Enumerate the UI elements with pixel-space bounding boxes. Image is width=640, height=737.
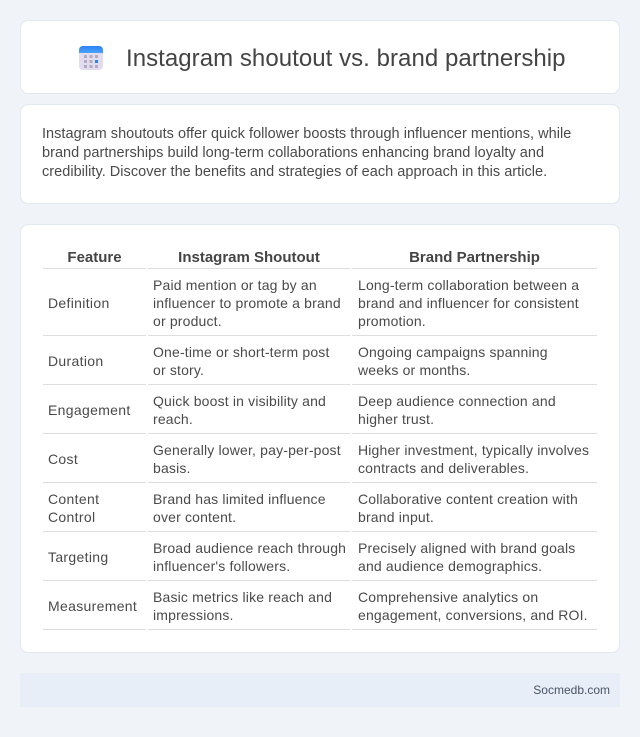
row: Engagement [48,393,556,427]
row: Content Control: Collaborative content creation with [358,491,578,507]
row: Measurement: Basic metrics like reach and [153,589,332,605]
panel: comparison table [20,224,620,653]
row: Definition: or product. [153,313,222,329]
row: Targeting: influencer's followers. [153,558,290,574]
row: Content Control: brand input. [358,509,434,525]
row: Cost [48,442,589,476]
row: Duration [48,344,548,378]
row: Targeting [48,540,575,574]
row: Definition: brand and influencer for consistent [358,295,579,311]
row: Engagement: Quick boost in visibility and [153,393,326,409]
row: Duration: Duration [48,353,103,369]
row: Targeting: Targeting [48,549,108,565]
table header: Feature [67,249,122,266]
row: Measurement: engagement, conversions, and ROI. [358,607,588,623]
row: Measurement [48,589,588,623]
row: Definition: promotion. [358,313,426,329]
footer [20,673,620,707]
row: Content Control: over content. [153,509,236,525]
row: Engagement: Deep audience connection and [358,393,556,409]
intro text: credibility. Discover the benefits and strategies of each approach in this article. [42,164,547,180]
row: Content Control [48,491,578,525]
row: Targeting: and audience demographics. [358,558,542,574]
row: Definition: Definition [48,295,110,311]
row: Engagement: reach. [153,411,193,427]
intro text: brand partnerships build long-term collaborations enhancing brand loyalty and [42,145,544,161]
row: Targeting: Precisely aligned with brand goals [358,540,575,556]
row: Measurement: Comprehensive analytics on [358,589,538,605]
panel: introduction [20,104,620,204]
row: Definition: influencer to promote a brand [153,295,341,311]
row: Content Control: Control [48,509,95,525]
row: Definition [48,277,580,329]
row: Duration: or story. [153,362,204,378]
row: Content Control: Brand has limited influence [153,491,326,507]
row: Definition: Paid mention or tag by an [153,277,317,293]
row: Cost: contracts and deliverables. [358,460,529,476]
panel: title card [20,20,620,94]
intro text [42,126,571,180]
row: Content Control: Content [48,491,99,507]
row: Measurement: impressions. [153,607,234,623]
row: Engagement: Engagement [48,402,131,418]
row: Definition: Long-term collaboration between a [358,277,579,293]
row: Cost: basis. [153,460,191,476]
row: Measurement: Measurement [48,598,137,614]
row: Cost: Higher investment, typically involves [358,442,589,458]
row: Duration: Ongoing campaigns spanning [358,344,548,360]
title: Instagram shoutout vs. brand partnership [126,45,566,72]
row: Cost: Generally lower, pay-per-post [153,442,341,458]
footer text: Socmedb.com [533,683,610,697]
table header: Instagram Shoutout [178,249,320,266]
row: Engagement: higher trust. [358,411,434,427]
row: Cost: Cost [48,451,78,467]
row: Duration: weeks or months. [358,362,470,378]
row: Targeting: Broad audience reach through [153,540,346,556]
intro text: Instagram shoutouts offer quick follower boosts through influencer mentions, while [42,126,571,142]
row: Duration: One-time or short-term post [153,344,330,360]
table header: Brand Partnership [409,249,540,266]
icon: calendar [79,46,103,70]
table header [67,249,540,266]
